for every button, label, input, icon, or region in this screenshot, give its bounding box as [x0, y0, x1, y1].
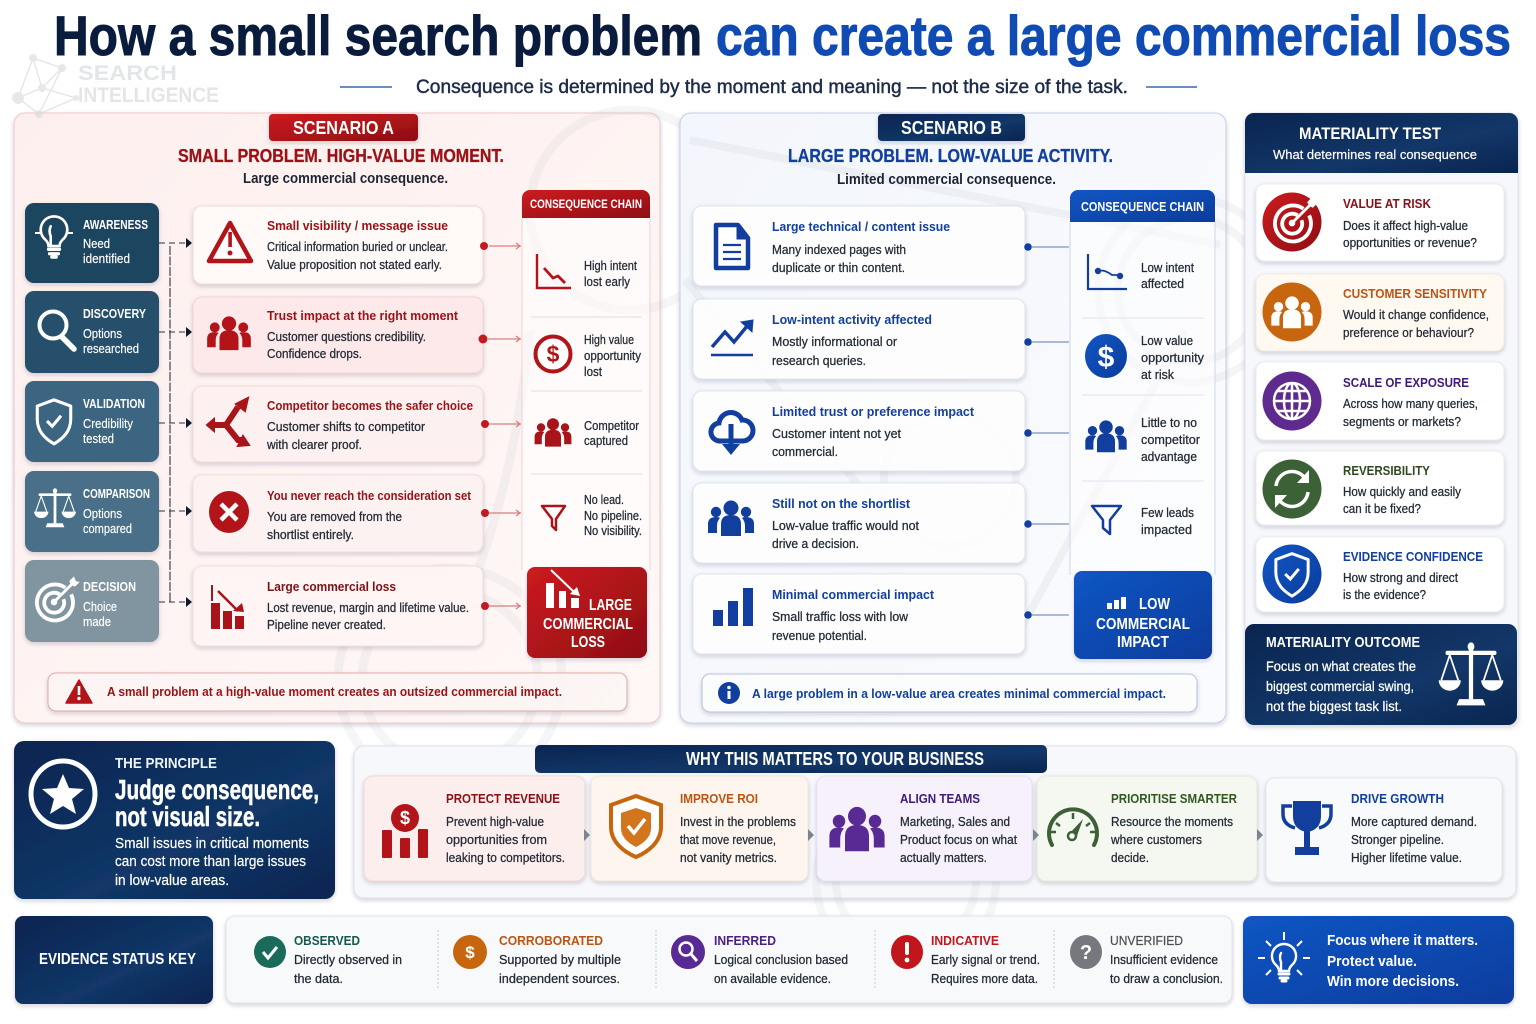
test: reversibility [1256, 451, 1504, 525]
panel: scenario B [680, 113, 1282, 723]
test: scale of exposure [1256, 362, 1504, 440]
card: never reach consideration set [193, 475, 483, 552]
card: limited trust: Limited trust or preference impact [772, 404, 975, 419]
stage: comparison: compared [83, 522, 132, 536]
benefit: align teams: Marketing, Sales and [900, 815, 1010, 829]
benefit: drive growth: More captured demand. [1351, 815, 1477, 829]
test: evidence confidence: How strong and direct [1343, 571, 1458, 585]
consequence chain B [1070, 190, 1215, 659]
test: evidence confidence [1256, 537, 1504, 612]
card: limited trust [693, 391, 1025, 471]
test: customer sensitivity: Would it change confidence, [1343, 308, 1489, 322]
chain item: low intent: Low intent [1141, 261, 1194, 275]
outcome box: large commercial loss: LARGE [589, 597, 632, 614]
principle panel: THE PRINCIPLE [115, 755, 217, 772]
evidence status key label: EVIDENCE STATUS KEY [39, 951, 196, 968]
status: corroborated [453, 933, 621, 986]
heading: scenario B [788, 146, 1113, 188]
subtitle: Consequence is determined by the moment and meaning — not the size of the task. [416, 77, 1128, 98]
card: never reach consideration set: shortlist entirely. [267, 528, 354, 542]
icon: trend line [711, 320, 753, 355]
chain item: little competitor advantage: competitor [1141, 433, 1200, 447]
benefit: drive growth: Higher lifetime value. [1351, 851, 1462, 865]
icon: balance scales [1439, 642, 1503, 705]
chain item: little competitor advantage: advantage [1141, 450, 1197, 464]
benefit: protect revenue: opportunities from [446, 833, 547, 847]
test: scale of exposure: SCALE OF EXPOSURE [1343, 375, 1469, 390]
chain header A: CONSEQUENCE CHAIN [530, 197, 642, 211]
focus callout: Win more decisions. [1327, 973, 1459, 990]
stage: decision: made [83, 615, 111, 629]
heading: scenario A: SMALL PROBLEM. HIGH-VALUE MOMENT. [178, 146, 504, 166]
benefit: prioritise smarter: Resource the moments [1111, 815, 1233, 829]
status: inferred [671, 933, 848, 986]
stage: validation: Credibility [83, 417, 134, 431]
status: unverified [1070, 933, 1223, 986]
test: reversibility: can it be fixed? [1343, 502, 1421, 516]
stage: decision: Choice [83, 600, 117, 614]
icon: falling bars [211, 585, 244, 629]
test: scale of exposure: segments or markets? [1343, 415, 1461, 429]
card: trust impact: Confidence drops. [267, 347, 362, 361]
card: large commercial loss: Large commercial loss [267, 579, 396, 594]
watermark logo [12, 54, 219, 118]
chain item: high value lost [536, 333, 642, 379]
connectors A [478, 242, 521, 610]
status: unverified: ? [1080, 942, 1092, 964]
chain item: low value: at risk [1141, 368, 1175, 382]
outcome box: large commercial loss [527, 567, 647, 658]
chain header B [1070, 190, 1215, 222]
chain item: high intent lost: lost early [584, 275, 631, 289]
test: value at risk: Does it affect high-value [1343, 219, 1468, 233]
benefit: improve ROI: that move revenue, [680, 833, 776, 847]
status: observed [254, 933, 402, 986]
status: unverified: Insufficient evidence [1110, 953, 1218, 967]
stage: validation: VALIDATION [83, 397, 145, 411]
principle panel: can cost more than large issues [115, 854, 306, 870]
card: still not on shortlist [693, 483, 1025, 563]
benefit: prioritise smarter: decide. [1111, 851, 1149, 865]
chain item: competitor captured: captured [584, 434, 628, 448]
chain item: no lead: No lead. [584, 493, 624, 507]
icon: red cross [209, 491, 249, 533]
chain item: competitor captured [535, 418, 639, 448]
focus callout [1243, 916, 1514, 1004]
card: trust impact: Customer questions credibility. [267, 330, 426, 344]
test: value at risk: opportunities or revenue? [1343, 236, 1477, 250]
callout B [702, 674, 1197, 712]
stage: awareness: Need [83, 237, 110, 251]
chain item: few leads [1092, 506, 1194, 537]
materiality header [1245, 113, 1518, 173]
card: limited trust: commercial. [772, 445, 838, 459]
heading: scenario B: Limited commercial consequence. [837, 171, 1056, 188]
heading: scenario B: LARGE PROBLEM. LOW-VALUE ACTIVITY. [788, 146, 1113, 166]
test: reversibility: REVERSIBILITY [1343, 463, 1430, 478]
card: trust impact [193, 297, 483, 373]
card: minimal commercial impact: Minimal commercial impact [772, 587, 935, 602]
outcome box: low commercial impact [1074, 571, 1212, 659]
callout A [48, 673, 627, 711]
card: small visibility issue: Value proposition not stated early. [267, 258, 442, 272]
watermark rings bottom [816, 790, 996, 970]
stage: comparison: COMPARISON [83, 487, 150, 501]
benefit: drive growth: Stronger pipeline. [1351, 833, 1444, 847]
evidence status key label [15, 916, 213, 1004]
card: small visibility issue: Small visibility / message issue [267, 218, 448, 233]
benefit: align teams [817, 776, 1032, 881]
chain item: low value [1085, 334, 1205, 382]
badge: scenario A [269, 114, 418, 141]
card: large commercial loss: Pipeline never created. [267, 618, 386, 632]
test: scale of exposure: Across how many queries, [1343, 397, 1478, 411]
icon: warning triangle [209, 223, 251, 261]
benefit: align teams: ALIGN TEAMS [900, 791, 980, 806]
icon: document [716, 225, 748, 268]
principle panel: Small issues in critical moments [115, 836, 309, 852]
chain item: low value: $ [1098, 341, 1115, 374]
materiality outcome: biggest commercial swing, [1266, 679, 1414, 694]
card: large technical issue: duplicate or thin content. [772, 261, 905, 275]
card: large commercial loss [193, 566, 483, 646]
chain item: competitor captured: Competitor [584, 419, 639, 433]
card: low-intent activity: Mostly informational or [772, 335, 897, 349]
flow arrows [584, 829, 1263, 841]
panel: why this matters [354, 745, 1516, 970]
watermark rings B [685, 140, 1282, 630]
status: observed: the data. [294, 972, 343, 986]
heading: scenario A [178, 146, 504, 187]
status: corroborated: $ [465, 943, 475, 962]
status: observed: OBSERVED [294, 933, 360, 948]
focus callout: Focus where it matters. [1327, 932, 1478, 949]
card: small visibility issue [193, 206, 483, 284]
benefit: improve ROI: IMPROVE ROI [680, 791, 758, 806]
test: customer sensitivity: preference or behaviour? [1343, 326, 1474, 340]
test: customer sensitivity [1256, 274, 1504, 351]
icon: cloud with arrow [711, 413, 753, 455]
benefit: prioritise smarter [1037, 776, 1257, 881]
stage: awareness: identified [83, 252, 130, 266]
title [54, 4, 1511, 67]
benefit: prioritise smarter: PRIORITISE SMARTER [1111, 791, 1238, 806]
badge: scenario B: SCENARIO B [901, 118, 1002, 138]
card: minimal commercial impact [693, 574, 1025, 654]
materiality outcome: MATERIALITY OUTCOME [1266, 634, 1420, 651]
chain item: few leads: Few leads [1141, 506, 1194, 520]
callout B: A large problem in a low-value area creates minimal commercial impact. [752, 686, 1166, 701]
card: large technical issue [693, 206, 1025, 286]
test: value at risk: VALUE AT RISK [1343, 196, 1432, 211]
stage: comparison [25, 471, 159, 552]
card: low-intent activity: Low-intent activity affected [772, 312, 932, 327]
chain item: high value lost: High value [584, 333, 634, 347]
benefit: protect revenue: Prevent high-value [446, 815, 544, 829]
card: still not on shortlist: Low-value traffic would not [772, 519, 920, 533]
chain item: high intent lost [537, 254, 637, 289]
stage: awareness: AWARENESS [83, 218, 148, 232]
title: How a small search problem [54, 4, 702, 67]
outcome box: large commercial loss: COMMERCIAL [543, 616, 633, 633]
chain item: low value: opportunity [1141, 351, 1205, 365]
benefit: drive growth [1266, 778, 1502, 882]
chain header B: CONSEQUENCE CHAIN [1081, 199, 1204, 214]
card: competitor: with clearer proof. [266, 438, 362, 452]
evidence key panel [226, 916, 1232, 1003]
card: low-intent activity: research queries. [772, 354, 866, 368]
principle panel [14, 741, 335, 899]
card: low-intent activity [693, 299, 1025, 379]
heading: scenario A: Large commercial consequence. [243, 170, 448, 187]
outcome box: low commercial impact: LOW [1139, 596, 1171, 613]
panel: scenario A [14, 110, 730, 792]
chain item: high intent lost: High intent [584, 259, 637, 273]
status: observed: Directly observed in [294, 953, 402, 967]
icon: star [31, 761, 95, 827]
materiality header: What determines real consequence [1273, 147, 1477, 162]
benefit: align teams: Product focus on what [900, 833, 1017, 847]
icon: split arrows [207, 398, 249, 446]
benefit: improve ROI: Invest in the problems [680, 815, 796, 829]
test: value at risk [1256, 184, 1504, 261]
benefit: improve ROI [591, 776, 808, 881]
principle panel: Judge consequence, [115, 774, 319, 805]
status: inferred: INFERRED [714, 933, 776, 948]
chain item: little competitor advantage [1085, 416, 1200, 464]
outcome box: low commercial impact: IMPACT [1117, 634, 1169, 651]
benefit: prioritise smarter: where customers [1110, 833, 1202, 847]
materiality outcome: not the biggest task list. [1266, 699, 1402, 714]
card: never reach consideration set: You are removed from the [267, 510, 402, 524]
outcome box: low commercial impact: COMMERCIAL [1096, 616, 1190, 633]
chain header A [522, 190, 650, 218]
test: evidence confidence: is the evidence? [1343, 588, 1426, 602]
connectors B [1024, 243, 1069, 619]
status: indicative: Requires more data. [931, 972, 1038, 986]
status: unverified: to draw a conclusion. [1110, 972, 1223, 986]
test: reversibility: How quickly and easily [1343, 485, 1462, 499]
stage: decision [25, 560, 159, 642]
status: indicative: INDICATIVE [931, 933, 999, 948]
chain item: low intent [1088, 254, 1194, 291]
benefit: protect revenue: leaking to competitors. [446, 851, 565, 865]
card: large technical issue: Many indexed pages with [772, 243, 906, 257]
test: customer sensitivity: CUSTOMER SENSITIVITY [1343, 286, 1487, 301]
card: competitor [193, 386, 483, 462]
badge: scenario B [878, 114, 1025, 141]
card: limited trust: Customer intent not yet [772, 427, 902, 441]
card: competitor: Competitor becomes the safer choice [267, 398, 473, 413]
stage: validation [25, 381, 159, 462]
benefit: improve ROI: not vanity metrics. [680, 851, 777, 865]
card: minimal commercial impact: revenue potential. [772, 629, 867, 643]
chain item: no lead: No pipeline. [584, 509, 642, 523]
materiality outcome [1245, 624, 1517, 725]
card: large technical issue: Large technical / content issue [772, 219, 950, 234]
status: inferred: on available evidence. [714, 972, 831, 986]
why header: WHY THIS MATTERS TO YOUR BUSINESS [686, 749, 984, 769]
status: indicative: Early signal or trend. [931, 953, 1040, 967]
chain item: few leads: impacted [1141, 523, 1192, 537]
stage: comparison: Options [83, 507, 122, 521]
watermark logo: INTELLIGENCE [78, 84, 219, 107]
focus callout: Protect value. [1327, 953, 1417, 970]
icon: rising bars [713, 588, 753, 626]
stage: discovery: Options [83, 327, 122, 341]
status: corroborated: CORROBORATED [499, 933, 603, 948]
icon: light bulb [1258, 932, 1310, 981]
panel: materiality test [1245, 113, 1518, 725]
chain item: little competitor advantage: Little to no [1141, 416, 1197, 430]
card: large commercial loss: Lost revenue, margin and lifetime value. [267, 601, 469, 615]
stage: decision: DECISION [83, 580, 136, 594]
card: minimal commercial impact: Small traffic loss with low [772, 610, 909, 624]
benefit: protect revenue: $ [400, 808, 410, 828]
watermark rings A [338, 110, 730, 792]
card: competitor: Customer shifts to competitor [267, 420, 425, 434]
test: evidence confidence: EVIDENCE CONFIDENCE [1343, 549, 1483, 564]
status: inferred: Logical conclusion based [714, 953, 848, 967]
callout A: A small problem at a high-value moment creates an outsized commercial impact. [107, 684, 562, 699]
benefit: protect revenue: PROTECT REVENUE [446, 791, 560, 806]
benefit: drive growth: DRIVE GROWTH [1351, 791, 1444, 806]
icon: people [708, 500, 754, 536]
status: indicative [891, 933, 1040, 986]
stage: awareness [25, 203, 159, 283]
chain item: high value lost: lost [584, 365, 602, 379]
card: still not on shortlist: Still not on the shortlist [772, 496, 911, 511]
benefit: protect revenue [364, 776, 585, 881]
benefit: align teams: actually matters. [900, 851, 987, 865]
status: corroborated: independent sources. [499, 972, 620, 986]
stage: discovery [25, 291, 159, 373]
materiality outcome: Focus on what creates the [1266, 659, 1416, 674]
card: trust impact: Trust impact at the right moment [267, 308, 459, 323]
status: corroborated: Supported by multiple [499, 953, 621, 967]
icon: people [207, 316, 251, 350]
outcome box: large commercial loss: LOSS [571, 634, 605, 651]
why header [535, 745, 1047, 773]
materiality header: MATERIALITY TEST [1299, 124, 1442, 143]
stage: discovery: DISCOVERY [83, 307, 147, 321]
card: small visibility issue: Critical information buried or unclear. [267, 240, 448, 254]
principle panel: in low-value areas. [115, 873, 229, 889]
stage: validation: tested [83, 432, 114, 446]
chain item: high value lost: $ [547, 341, 560, 367]
badge: scenario A: SCENARIO A [293, 118, 394, 138]
chain item: low intent: affected [1141, 277, 1184, 291]
chain item: low value: Low value [1141, 334, 1193, 348]
principle panel: not visual size. [115, 801, 260, 832]
card: never reach consideration set: You never reach the consideration set [267, 488, 472, 503]
chain item: no lead [542, 493, 642, 538]
chain item: no lead: No visibility. [584, 524, 642, 538]
chain item: high value lost: opportunity [584, 349, 642, 363]
watermark logo: SEARCH [78, 62, 177, 85]
journey connectors [159, 238, 192, 607]
status: unverified: UNVERIFIED [1110, 933, 1183, 948]
consequence chain A [522, 190, 650, 658]
stage: discovery: researched [83, 342, 139, 356]
card: still not on shortlist: drive a decision. [772, 537, 859, 551]
